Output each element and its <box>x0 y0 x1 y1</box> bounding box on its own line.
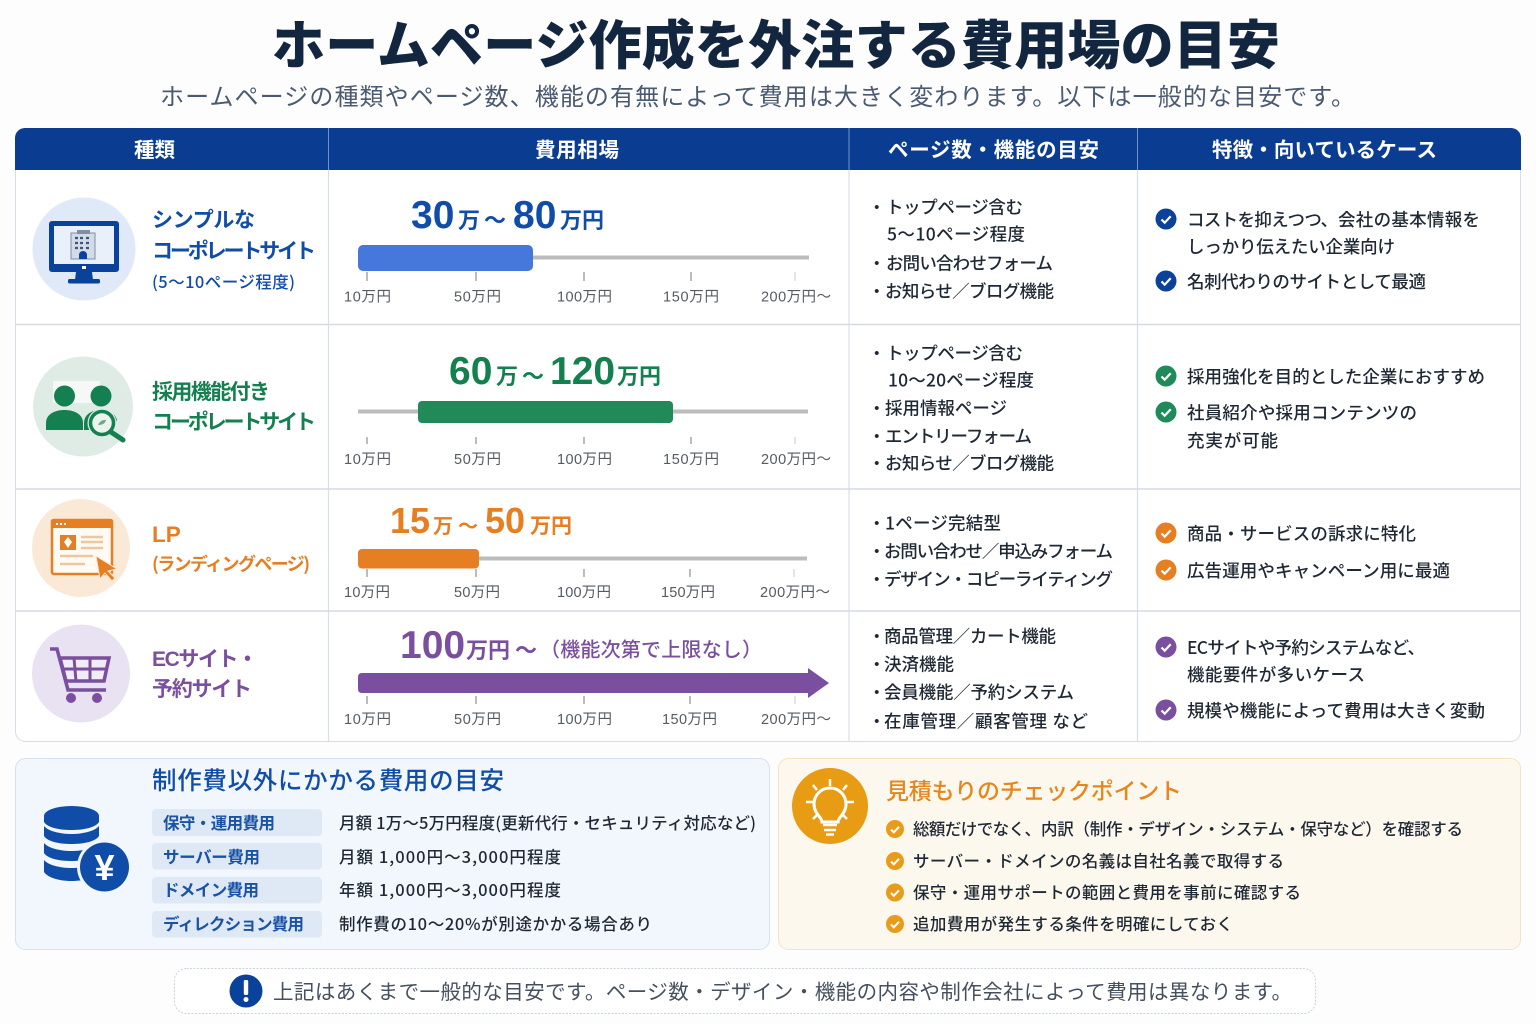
cost item: server: サーバー費用 <box>163 844 260 868</box>
label: landing page: (ランディングページ) <box>152 550 310 576</box>
price: 30万〜80万円: 80 <box>513 194 556 237</box>
price: 60万〜120万円: 〜 <box>522 364 544 389</box>
features: simple corporate site: しっかり伝えたい企業向け <box>1187 234 1395 259</box>
details: EC and booking site: 在庫管理／顧客管理 など <box>884 709 1088 734</box>
features: simple corporate site: 名刺代わりのサイトとして最適 <box>1187 269 1426 294</box>
cost item: maintenance: 月額 1万〜5万円程度(更新代行・セキュリティ対応など) <box>339 810 756 834</box>
details: landing page <box>868 511 1113 592</box>
cost item: domain: ドメイン費用 <box>163 877 259 901</box>
row: corporate site with recruiting <box>33 341 1485 476</box>
title: ホームページ作成を外注する費用場の目安 <box>272 4 1280 80</box>
price: 100万円〜: 万円 <box>466 638 510 663</box>
price: 15万〜50万円: 〜 <box>458 516 478 538</box>
label: simple corporate site <box>152 209 316 293</box>
axis labels <box>344 585 830 601</box>
label: corporate site with recruiting: 採用機能付き <box>152 381 270 404</box>
features: EC and booking site: ECサイトや予約システムなど、 <box>1187 635 1425 660</box>
details: corporate site with recruiting: 10〜20ページ程度 <box>888 368 1034 393</box>
cost item: direction <box>152 911 652 938</box>
cost chart: 30-80 <box>344 194 831 306</box>
details: EC and booking site: ・ <box>868 624 886 649</box>
features: landing page <box>1156 521 1450 583</box>
table header row: 特徴・向いているケース <box>1212 133 1437 163</box>
icon: monitor with building <box>32 198 136 300</box>
cost chart: 100 and up <box>344 624 831 728</box>
label: EC and booking site: ECサイト・ <box>152 648 258 671</box>
label: EC and booking site <box>152 648 258 701</box>
disclaimer text: 上記はあくまで一般的な目安です。ページ数・デザイン・機能の内容や制作会社によって費用は異なります。 <box>273 975 1292 1005</box>
details: corporate site with recruiting: エントリーフォーム <box>885 424 1032 449</box>
checklist: サーバー・ドメインの名義は自社名義で取得する <box>913 848 1284 872</box>
details: corporate site with recruiting: お知らせ／ブログ機能 <box>885 451 1054 476</box>
panel: estimate checkpoints <box>778 758 1520 950</box>
axis labels: 150万円 <box>661 585 715 601</box>
cost item: maintenance: 保守・運用費用 <box>163 810 275 834</box>
row: landing page <box>32 499 1450 601</box>
details: corporate site with recruiting: 採用情報ページ <box>885 396 1007 421</box>
features: landing page: 広告運用やキャンペーン用に最適 <box>1187 558 1450 583</box>
price: 15万〜50万円: 万円 <box>530 515 572 538</box>
price: 30万〜80万円: 万円 <box>560 208 604 233</box>
table header row: 種類 <box>134 133 176 163</box>
price: 60万〜120万円: 120 <box>550 350 615 393</box>
price: 60万〜120万円: 60 <box>449 350 492 393</box>
axis labels <box>344 452 831 468</box>
axis labels <box>344 290 831 306</box>
icon: browser window with cursor <box>32 499 130 597</box>
price: 60万〜120万円: 万 <box>496 364 518 389</box>
axis labels: 10万円 <box>344 585 390 601</box>
price: 30万〜80万円: 30 <box>411 194 454 237</box>
axis labels: 100万円 <box>557 290 612 306</box>
callout: disclaimer <box>174 968 1316 1014</box>
icon: people with magnifier <box>33 356 133 456</box>
cost chart: 15-50 <box>344 500 830 601</box>
price: 30万〜80万円: 万 <box>458 208 480 233</box>
icon: database with yen coin: ¥ <box>94 847 115 888</box>
row: EC and booking site <box>32 624 1485 734</box>
features: corporate site with recruiting: 充実が可能 <box>1187 428 1278 453</box>
heading: estimate checkpoints: 見積もりのチェックポイント <box>886 772 1182 806</box>
label: corporate site with recruiting <box>152 381 316 434</box>
details: simple corporate site: ・ <box>868 279 886 304</box>
features: corporate site with recruiting <box>1156 364 1485 453</box>
price: 15万〜50万円: 50 <box>485 500 525 541</box>
price: 15万〜50万円: 万 <box>433 516 453 538</box>
arrow: range without upper limit <box>358 668 829 698</box>
details: EC and booking site: 商品管理／カート機能 <box>884 624 1056 649</box>
details: EC and booking site: 決済機能 <box>884 652 954 677</box>
details: landing page: お問い合わせ／申込みフォーム <box>884 539 1113 564</box>
price: 15万〜50万円: 15 <box>390 500 430 541</box>
cost item: direction: ディレクション費用 <box>163 911 304 935</box>
details: EC and booking site: ・ <box>868 652 886 677</box>
details: EC and booking site: ・ <box>868 680 886 705</box>
axis labels: 50万円 <box>454 452 501 468</box>
cost item: server: 月額 1,000円〜3,000円程度 <box>339 844 561 868</box>
table header row: ページ数・機能の目安 <box>888 133 1099 163</box>
label: EC and booking site: 予約サイト <box>152 678 252 701</box>
checklist: 保守・運用サポートの範囲と費用を事前に確認する <box>913 880 1301 904</box>
axis labels: 150万円 <box>663 290 719 306</box>
axis labels: 10万円 <box>344 712 391 728</box>
details: landing page: ・ <box>868 567 886 592</box>
details: EC and booking site: 会員機能／予約システム <box>884 680 1074 705</box>
details: EC and booking site <box>868 624 1088 734</box>
label: simple corporate site: (5〜10ページ程度) <box>152 269 295 293</box>
price: 100万円〜: 〜 <box>515 638 537 663</box>
axis labels: 200万円〜 <box>761 712 831 728</box>
axis labels: 200万円〜 <box>760 585 830 601</box>
cost chart: 60-120 <box>344 350 831 468</box>
details: simple corporate site: ・ <box>868 195 886 220</box>
label: landing page <box>152 522 310 576</box>
features: EC and booking site: 規模や機能によって費用は大きく変動 <box>1187 698 1485 723</box>
axis labels: 100万円 <box>557 585 611 601</box>
details: simple corporate site: お知らせ／ブログ機能 <box>885 279 1054 304</box>
features: simple corporate site <box>1156 207 1480 294</box>
note: no upper limit: （機能次第で上限なし） <box>540 634 762 662</box>
icon: shopping cart <box>32 624 130 722</box>
axis labels: 50万円 <box>454 585 500 601</box>
label: simple corporate site: コーポレートサイト <box>152 240 316 263</box>
checklist: 内訳（制作・デザイン・システム・保守など）を確認する <box>1041 816 1463 840</box>
cost item: maintenance <box>152 809 756 836</box>
cost item: domain: 年額 1,000円〜3,000円程度 <box>339 877 561 901</box>
details: corporate site with recruiting: トップページ含む <box>886 341 1023 366</box>
features: EC and booking site <box>1156 635 1485 723</box>
features: simple corporate site: 会社の基本情報を <box>1338 207 1480 232</box>
axis labels: 50万円 <box>454 712 501 728</box>
icon: exclamation mark <box>230 974 262 1008</box>
details: corporate site with recruiting: ・ <box>868 396 886 421</box>
axis labels: 10万円 <box>344 290 391 306</box>
axis labels <box>344 712 831 728</box>
table header row <box>134 133 1437 163</box>
icon: database with yen coin <box>44 806 132 894</box>
row: simple corporate site <box>32 194 1480 306</box>
features: landing page: 商品・サービスの訴求に特化 <box>1187 521 1416 546</box>
details: simple corporate site: 5〜10ページ程度 <box>887 222 1025 247</box>
table header row: 費用相場 <box>535 133 619 163</box>
axis labels: 150万円 <box>663 452 719 468</box>
features: EC and booking site: 機能要件が多いケース <box>1187 662 1365 687</box>
heading: other costs: 制作費以外にかかる費用の目安 <box>152 762 504 797</box>
features: corporate site with recruiting: 社員紹介や採用コンテンツの <box>1187 400 1417 425</box>
features: simple corporate site: コストを抑えつつ、 <box>1187 207 1338 232</box>
details: simple corporate site: ・ <box>868 251 886 276</box>
subtitle: ホームページの種類やページ数、機能の有無によって費用は大きく変わります。以下は一般的な目安です。 <box>160 77 1355 112</box>
details: landing page: デザイン・コピーライティング <box>884 567 1113 592</box>
details: EC and booking site: ・ <box>868 709 886 734</box>
checklist: 追加費用が発生する条件を明確にしておく <box>913 911 1233 935</box>
axis labels: 50万円 <box>454 290 501 306</box>
axis labels: 100万円 <box>557 712 612 728</box>
price: 100万円〜: 100 <box>400 624 465 667</box>
details: corporate site with recruiting: ・ <box>868 451 886 476</box>
cost item: domain <box>152 877 561 904</box>
cost item: server <box>152 843 561 870</box>
details: simple corporate site <box>868 195 1054 304</box>
axis labels: 150万円 <box>662 712 717 728</box>
label: simple corporate site: シンプルな <box>152 209 255 232</box>
details: simple corporate site: お問い合わせフォーム <box>886 251 1053 276</box>
axis labels: 10万円 <box>344 452 391 468</box>
checklist: 総額だけでなく、 <box>913 816 1041 840</box>
details: landing page: ・ <box>868 539 886 564</box>
axis labels: 200万円〜 <box>761 452 831 468</box>
features: corporate site with recruiting: 採用強化を目的とした企業におすすめ <box>1187 364 1485 389</box>
label: landing page: LP <box>152 522 181 547</box>
details: simple corporate site: トップページ含む <box>886 195 1023 220</box>
icon: light bulb <box>792 768 868 844</box>
price: 60万〜120万円: 万円 <box>617 364 661 389</box>
details: corporate site with recruiting <box>868 341 1054 476</box>
checklist <box>886 816 1463 935</box>
cost item: direction: 制作費の10〜20%が別途かかる場合あり <box>339 911 652 935</box>
table: cost comparison <box>15 128 1521 742</box>
details: landing page: ・ <box>868 511 886 536</box>
details: landing page: 1ページ完結型 <box>885 511 1001 536</box>
price: 30万〜80万円: 〜 <box>484 208 506 233</box>
label: corporate site with recruiting: コーポレートサイト <box>152 411 316 434</box>
details: corporate site with recruiting: ・ <box>868 424 886 449</box>
panel: other costs <box>16 758 770 950</box>
axis labels: 100万円 <box>557 452 612 468</box>
axis labels: 200万円〜 <box>761 290 831 306</box>
details: corporate site with recruiting: ・ <box>868 341 886 366</box>
